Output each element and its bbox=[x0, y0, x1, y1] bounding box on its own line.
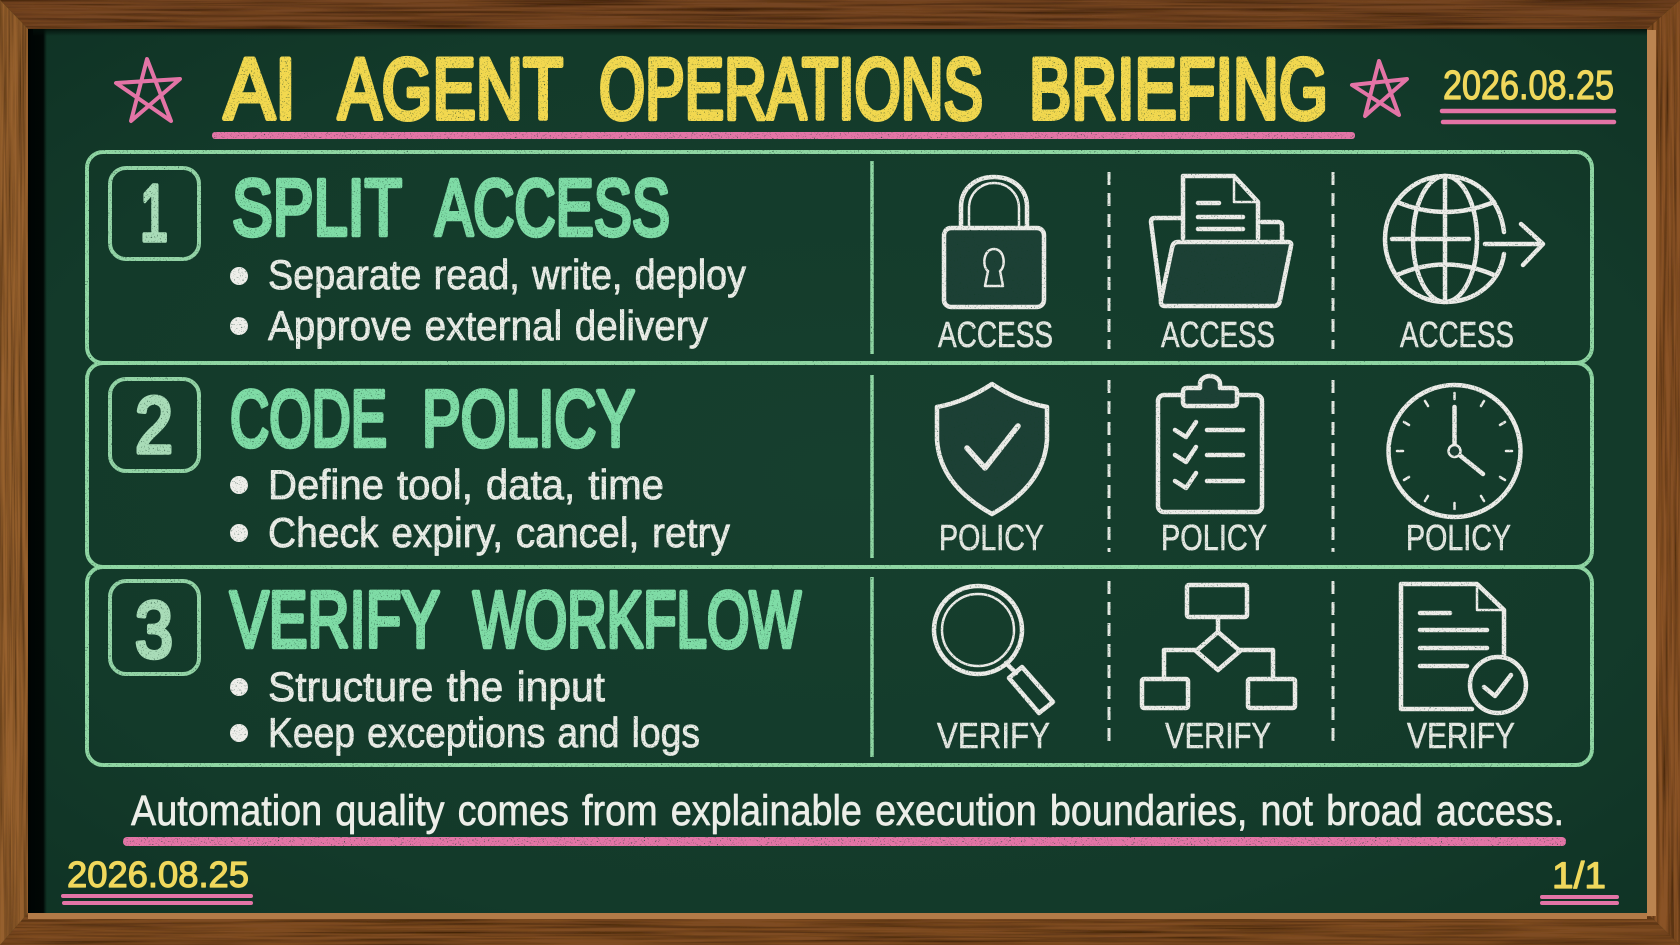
heading bbox=[232, 163, 670, 252]
icon: left pink star bbox=[116, 59, 180, 121]
number badge 3 bbox=[110, 581, 199, 674]
title: AGENT bbox=[338, 42, 563, 138]
icon: document with check badge bbox=[1401, 584, 1526, 713]
title: AI bbox=[224, 42, 296, 138]
panel: split access bbox=[87, 152, 1592, 363]
number badge 2 bbox=[110, 379, 199, 471]
bullet list: Structure the input bbox=[268, 663, 605, 710]
label: VERIFY bbox=[1407, 715, 1515, 756]
takeaway underline bbox=[123, 837, 1566, 846]
title bbox=[224, 42, 1328, 138]
icon: shield with check bbox=[937, 384, 1047, 514]
frame: top rail bbox=[0, 0, 1680, 29]
frame: bottom highlight bbox=[28, 913, 1647, 919]
bullet list: Separate read, write, deploy bbox=[268, 251, 746, 298]
icon: padlock bbox=[944, 177, 1044, 307]
panel: code policy bbox=[87, 363, 1592, 567]
page number bbox=[1542, 855, 1617, 903]
label: ACCESS bbox=[1400, 314, 1514, 355]
number badge 2: 2 bbox=[135, 380, 173, 470]
bullet list bbox=[230, 251, 746, 349]
heading: SPLIT bbox=[232, 163, 402, 252]
title underline bbox=[212, 132, 1355, 139]
heading: VERIFY bbox=[230, 575, 440, 664]
label: POLICY bbox=[939, 517, 1044, 558]
heading: WORKFLOW bbox=[473, 575, 801, 664]
heading: POLICY bbox=[422, 374, 635, 463]
heading: ACCESS bbox=[435, 163, 670, 252]
bullet list: Define tool, data, time bbox=[268, 461, 664, 508]
icon: folder with document bbox=[1151, 176, 1291, 306]
icon: globe with arrow bbox=[1385, 176, 1543, 302]
frame: bottom rail bbox=[0, 913, 1680, 945]
number badge 3: 3 bbox=[135, 585, 173, 674]
bullet list bbox=[230, 663, 700, 756]
title: OPERATIONS bbox=[599, 42, 983, 138]
icon: flowchart bbox=[1142, 585, 1295, 708]
bullet list bbox=[230, 461, 730, 556]
number badge 1 bbox=[110, 168, 199, 259]
panel outline bbox=[87, 363, 1592, 567]
frame: right inner bevel bbox=[1647, 30, 1656, 916]
column dividers bbox=[872, 577, 1333, 757]
bullet list: Check expiry, cancel, retry bbox=[268, 509, 730, 556]
bullet list: Approve external delivery bbox=[268, 302, 708, 349]
title: BRIEFING bbox=[1029, 42, 1328, 138]
date top right: 2026.08.25 bbox=[1443, 62, 1614, 108]
heading: CODE bbox=[230, 374, 387, 463]
panel outline bbox=[87, 567, 1592, 765]
icon: right pink star bbox=[1352, 61, 1407, 116]
bullet list: Keep exceptions and logs bbox=[268, 709, 700, 756]
panel: verify workflow bbox=[87, 567, 1592, 765]
column dividers bbox=[872, 375, 1333, 558]
heading bbox=[230, 575, 801, 664]
frame: left rail bbox=[0, 0, 28, 945]
frame: right rail bbox=[1647, 0, 1680, 945]
icon: magnifying glass bbox=[934, 586, 1053, 713]
icon: clock bbox=[1388, 385, 1520, 517]
number badge 1: 1 bbox=[140, 168, 168, 258]
label: ACCESS bbox=[1161, 314, 1275, 355]
column dividers bbox=[872, 161, 1333, 354]
label: VERIFY bbox=[1165, 715, 1271, 756]
label: ACCESS bbox=[938, 314, 1053, 355]
heading bbox=[230, 374, 635, 463]
date bottom left: 2026.08.25 bbox=[67, 854, 249, 895]
panel outline bbox=[87, 152, 1592, 363]
label: POLICY bbox=[1161, 517, 1267, 558]
page number: 1/1 bbox=[1552, 855, 1606, 896]
label: VERIFY bbox=[937, 715, 1050, 756]
label: POLICY bbox=[1406, 517, 1511, 558]
icon: clipboard checklist bbox=[1158, 376, 1262, 512]
